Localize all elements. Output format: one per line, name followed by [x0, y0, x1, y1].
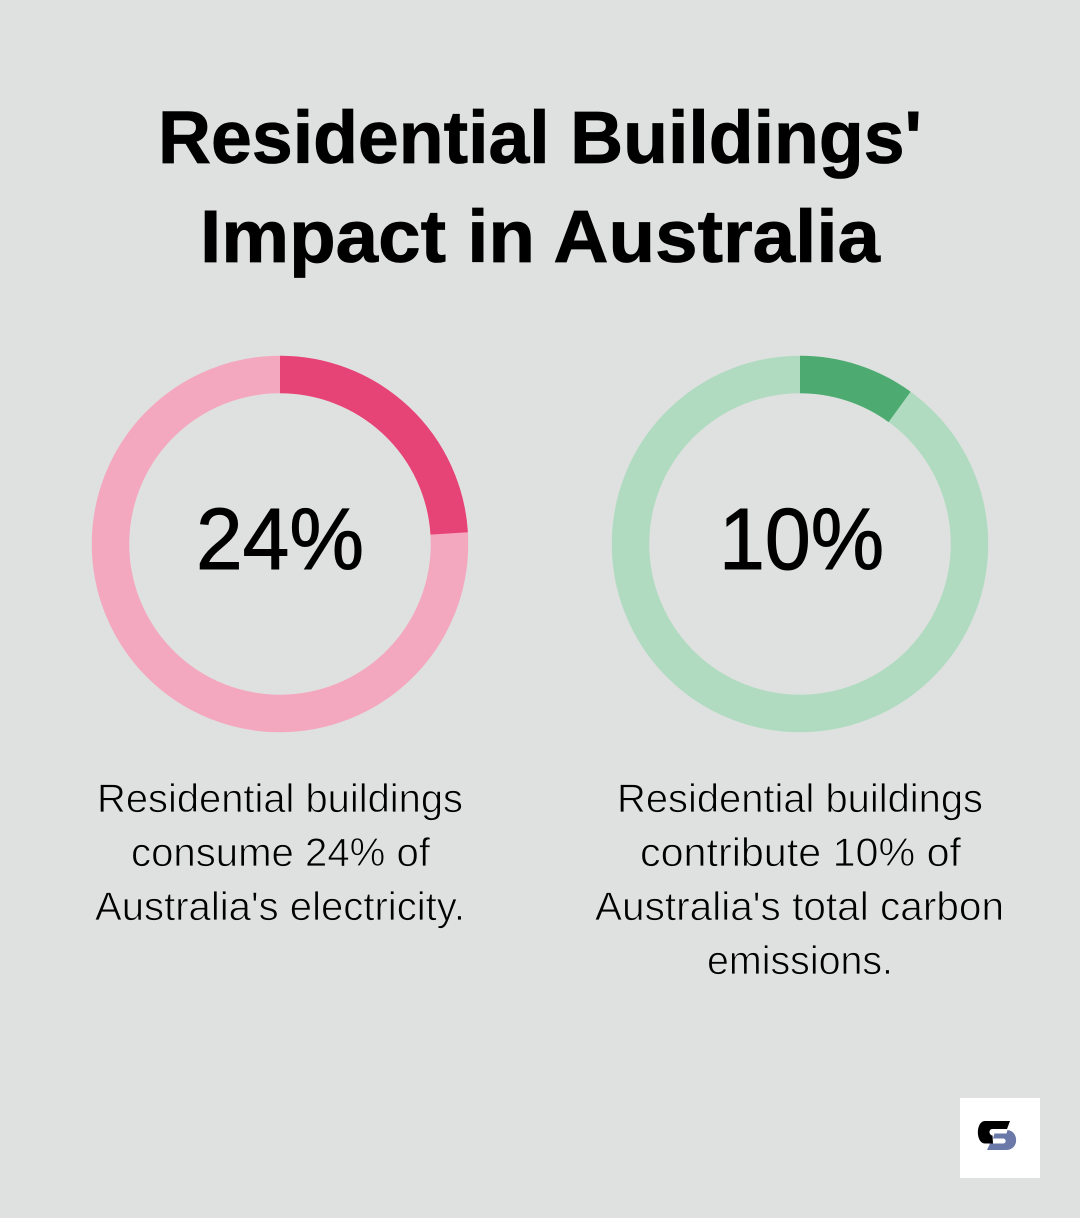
description: carbon emissions: contribute 10% of — [640, 831, 962, 875]
description: electricity — [95, 777, 465, 929]
description: electricity: Australia's electricity. — [95, 885, 465, 929]
description: electricity: Residential buildings — [97, 777, 463, 821]
panel: electricity statistic — [95, 374, 465, 929]
description: carbon emissions: Australia's total carbon — [595, 885, 1004, 929]
value: 10%: 10% — [719, 491, 884, 588]
title: Impact in Australia — [200, 195, 881, 278]
value: 24%: 24% — [196, 491, 364, 588]
title — [158, 96, 922, 278]
panel: carbon emissions statistic — [595, 374, 1004, 983]
donut chart: 24% — [110, 374, 450, 714]
description: carbon emissions — [595, 777, 1004, 983]
description: carbon emissions: emissions. — [707, 939, 893, 983]
description: carbon emissions: Residential buildings — [617, 777, 983, 821]
title: Residential Buildings' — [158, 96, 922, 179]
donut chart: 10% — [630, 374, 970, 714]
description: electricity: consume 24% of — [131, 831, 431, 875]
icon: brand logo — [960, 1098, 1040, 1178]
